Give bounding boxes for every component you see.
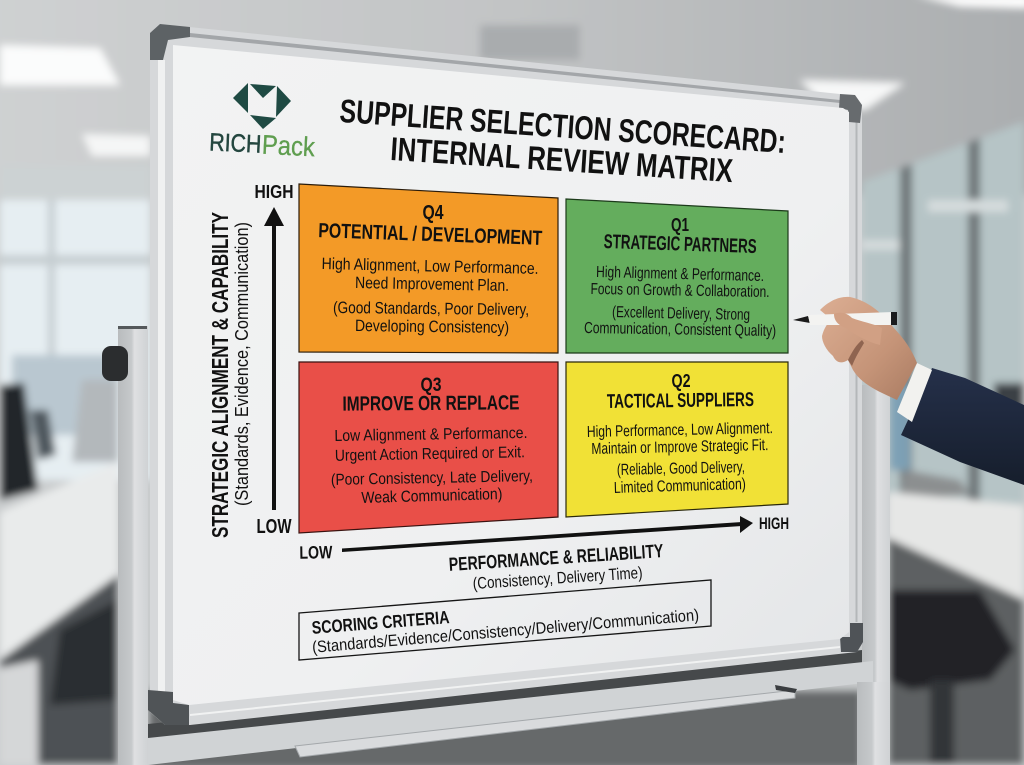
quadrant Q3 [299,362,558,533]
x axis subtitle: (Consistency, Delivery Time) [472,564,643,593]
quadrant Q1: Focus on Growth & Collaboration. [590,281,770,301]
stand: right post [862,385,890,765]
title: INTERNAL REVIEW MATRIX [389,130,734,189]
shirt cuff [897,363,932,422]
quadrant Q2: High Performance, Low Alignment. [587,420,773,441]
gap shadow behind board [148,650,862,742]
quadrant Q1 [566,199,788,353]
top-right corner [839,94,862,123]
quadrant Q2: TACTICAL SUPPLIERS [607,389,754,413]
suit sleeve [901,368,1024,485]
quadrant Q3: Urgent Action Required or Exit. [335,444,525,465]
x axis title: PERFORMANCE & RELIABILITY [448,541,664,576]
stand: left post [118,326,148,765]
quadrant Q1: Q1 [671,215,689,235]
quadrant Q3: Q3 [420,375,442,396]
logo wordmark: RICH [209,128,262,159]
quadrant Q2: (Reliable, Good Delivery, [617,459,745,479]
quadrant Q4: Developing Consistency) [355,317,509,337]
quadrant Q4: Need Improvement Plan. [355,274,509,295]
quadrant Q3: Weak Communication) [361,486,503,507]
quadrant Q1: High Alignment & Performance. [596,264,764,285]
scoring criteria box [299,580,711,660]
hand holding marker [793,297,1024,485]
x axis low label: LOW [299,542,333,563]
y axis subtitle: (Standards, Evidence, Communication) [232,222,252,506]
post cap [118,326,147,329]
scoring criteria box: (Standards/Evidence/Consistency/Delivery/Communication) [312,606,700,657]
quadrant Q4: (Good Standards, Poor Delivery, [333,299,529,319]
quadrant Q2: Limited Communication) [614,476,746,497]
logo wordmark [209,128,316,162]
x axis [299,515,789,593]
thumb over marker [834,313,882,345]
hand [820,297,917,400]
y axis [207,181,294,538]
y axis arrow [264,207,284,510]
x axis high label: HIGH [759,515,789,533]
quadrant Q2: Maintain or Improve Strategic Fit. [591,437,769,458]
quadrant Q3: (Poor Consistency, Late Delivery, [331,468,533,489]
logo mark [233,83,291,129]
y axis low label: LOW [256,516,292,538]
marker [793,312,897,325]
post lower section [857,682,890,765]
bottom-right corner [840,623,863,652]
quadrant Q3: IMPROVE OR REPLACE [342,391,520,416]
tray end [775,685,797,693]
y axis title: STRATEGIC ALIGNMENT & CAPABILITY [207,212,233,538]
quadrant Q2 [566,362,788,517]
whiteboard frame [148,24,863,725]
quadrant Q1: Communication, Consistent Quality) [584,320,776,340]
quadrant Q1: (Excellent Delivery, Strong [612,304,750,324]
title [339,92,787,189]
bottom-left corner [148,690,189,725]
logo wordmark: Pack [261,130,316,162]
finger shadow [848,340,864,366]
quadrant Q3: Low Alignment & Performance. [334,425,528,445]
logo [209,83,316,162]
quadrant Q1: STRATEGIC PARTNERS [603,231,757,258]
stand knob [102,346,128,381]
y axis high label: HIGH [254,181,294,202]
quadrant Q2: Q2 [672,371,690,391]
quadrant Q4 [299,184,558,353]
scoring criteria box: SCORING CRITERIA [311,607,450,638]
marker tray [295,690,795,757]
title: SUPPLIER SELECTION SCORECARD: [339,92,787,160]
stand: lower crossbar [148,661,873,765]
x axis arrow [342,516,753,552]
quadrant Q4: POTENTIAL / DEVELOPMENT [318,219,543,250]
top-left corner [150,24,190,60]
quadrant Q4: High Alignment, Low Performance. [321,255,539,278]
quadrant Q4: Q4 [422,202,444,224]
whiteboard surface [173,45,849,705]
